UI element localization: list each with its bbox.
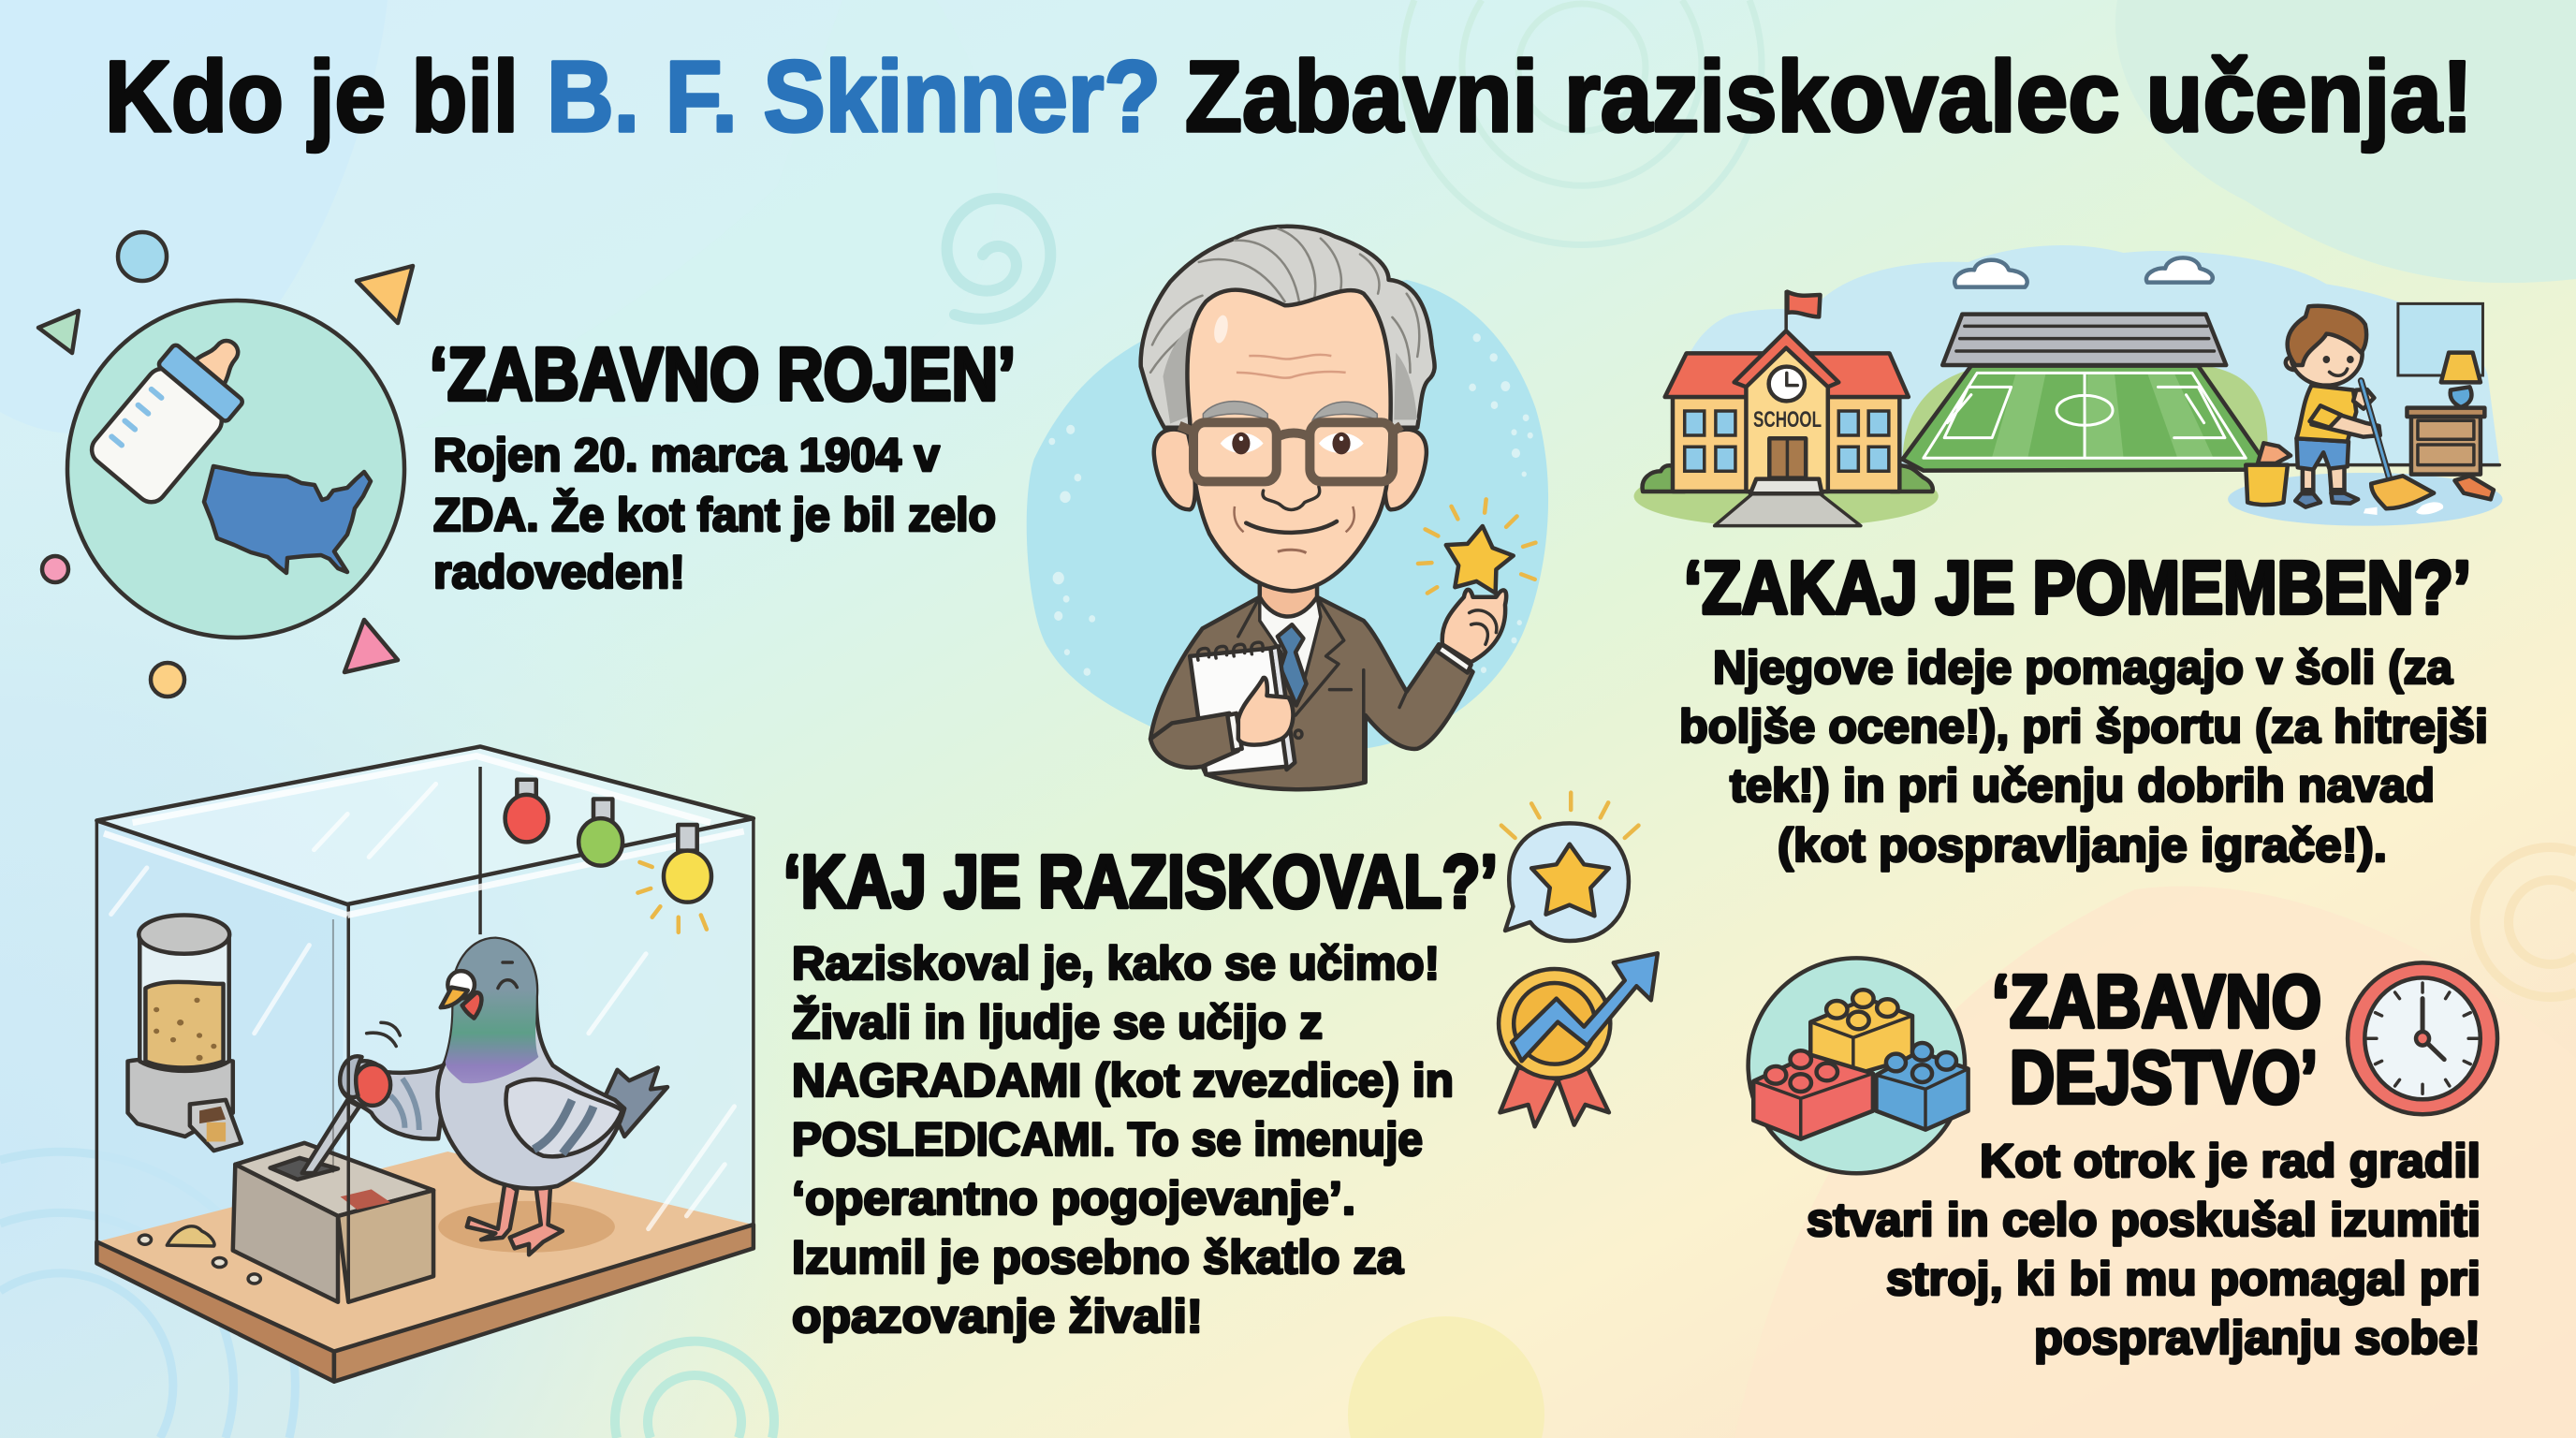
body: (kot pospravljanje igrače!). bbox=[1778, 819, 2387, 872]
blue blob bbox=[1027, 280, 1548, 749]
title bbox=[105, 39, 2473, 153]
body: stvari in celo poskušal izumiti bbox=[1807, 1194, 2481, 1246]
body: Kot otrok je rad gradil bbox=[1980, 1135, 2481, 1187]
clouds bbox=[1954, 257, 2213, 287]
icon: USA map bbox=[204, 466, 371, 573]
tower bbox=[1734, 330, 1838, 492]
green hill bbox=[1903, 365, 2268, 465]
notepad bbox=[1190, 642, 1295, 774]
hanging lights bbox=[505, 780, 711, 932]
panel: birth icon with bottle and USA bbox=[38, 232, 413, 697]
toy and debris bbox=[2364, 476, 2494, 515]
school wings bbox=[1673, 397, 1899, 492]
body: stroj, ki bi mu pomagal pri bbox=[1886, 1253, 2481, 1305]
body: NAGRADAMI (kot zvezdice) in bbox=[792, 1054, 1454, 1107]
title part: Kdo je bil: Kdo je bil bbox=[105, 39, 519, 153]
text block: Zabavno dejstvo bbox=[1807, 960, 2481, 1364]
illustration: school, sports field and tidying boy bbox=[1634, 245, 2503, 527]
icon: lego bricks in circle bbox=[1749, 958, 1969, 1173]
grandstand bbox=[1942, 315, 2226, 365]
room floor bbox=[2228, 465, 2503, 526]
icon: wall clock bbox=[2348, 962, 2497, 1114]
hair bbox=[1141, 227, 1435, 432]
seeds on floor bbox=[139, 1226, 260, 1284]
body bbox=[792, 937, 1454, 1343]
bushes bbox=[1643, 465, 1933, 492]
path bbox=[1715, 493, 1861, 526]
box walls bbox=[96, 746, 754, 1352]
lever box bbox=[233, 1143, 433, 1302]
body: boljše ocene!), pri športu (za hitrejši bbox=[1679, 700, 2488, 753]
body: tek!) in pri učenju dobrih navad bbox=[1730, 759, 2435, 812]
flag bbox=[1786, 292, 1821, 330]
body: ZDA. Že kot fant je bil zelo bbox=[433, 489, 996, 541]
neck bbox=[1260, 573, 1317, 617]
decorative circle pink bbox=[42, 556, 68, 582]
window in room bbox=[2398, 303, 2482, 375]
jacket bbox=[1150, 597, 1472, 789]
body: opazovanje živali! bbox=[792, 1290, 1203, 1343]
football field bbox=[1903, 366, 2263, 471]
right hand with cuff bbox=[1437, 590, 1506, 673]
text block: Zabavno rojen bbox=[430, 332, 1016, 598]
food dispenser bbox=[128, 915, 242, 1151]
body: Rojen 20. marca 1904 v bbox=[433, 429, 940, 481]
text block: Kaj je raziskoval bbox=[783, 840, 1498, 1343]
heading bbox=[1992, 960, 2321, 1119]
star in hand bbox=[1446, 526, 1514, 594]
shadow under pigeon bbox=[438, 1201, 615, 1253]
body: Izumil je posebno škatlo za bbox=[792, 1231, 1404, 1284]
heading: DEJSTVO’ bbox=[2010, 1035, 2318, 1119]
lever with red button bbox=[302, 1056, 390, 1173]
door and steps bbox=[1750, 438, 1822, 493]
school sign: SCHOOL bbox=[1753, 407, 1822, 433]
shirt and tie bbox=[1238, 597, 1407, 783]
school windows bbox=[1685, 411, 1889, 471]
sky blob bbox=[1673, 245, 2499, 468]
nightstand with lamp bbox=[2407, 353, 2484, 475]
bucket bbox=[2246, 443, 2291, 505]
title part: Zabavni raziskovalec učenja!: Zabavni raziskovalec učenja! bbox=[1185, 39, 2473, 153]
icon: star speech bubble bbox=[1501, 793, 1638, 941]
pigeon bbox=[341, 939, 667, 1255]
icon circle bbox=[67, 301, 404, 638]
left arm and hand bbox=[1150, 678, 1293, 768]
roof bbox=[1665, 353, 1909, 397]
body: POSLEDICAMI. To se imenuje bbox=[792, 1113, 1423, 1166]
decorative circle blue bbox=[118, 232, 167, 281]
boy bbox=[2286, 306, 2380, 507]
title part: B. F. Skinner?: B. F. Skinner? bbox=[547, 39, 1161, 153]
icons: star bubble, medal, lego and clock bbox=[1499, 793, 2497, 1173]
face bbox=[1187, 290, 1391, 591]
illustration: Skinner portrait bbox=[1027, 227, 1548, 789]
face details bbox=[1203, 314, 1377, 553]
body: ‘operantno pogojevanje’. bbox=[792, 1172, 1355, 1225]
body bbox=[1807, 1135, 2481, 1364]
body bbox=[1679, 641, 2488, 872]
ground under school bbox=[1634, 465, 1939, 527]
box base bbox=[96, 1225, 754, 1382]
icon: baby bottle bbox=[85, 315, 268, 508]
body: Živali in ljudje se učijo z bbox=[792, 996, 1323, 1049]
body: Njegove ideje pomagajo v šoli (za bbox=[1713, 641, 2453, 694]
heading: ‘ZABAVNO ROJEN’ bbox=[430, 332, 1016, 416]
body bbox=[433, 429, 996, 598]
heading: ‘ZAKAJ JE POMEMBEN?’ bbox=[1684, 546, 2471, 629]
heading: ‘ZABAVNO bbox=[1992, 960, 2321, 1043]
decorative circle yellow bbox=[151, 663, 184, 697]
illustration: pigeon in Skinner box bbox=[96, 746, 754, 1382]
ears bbox=[1154, 430, 1427, 509]
text block: Zakaj je pomemben bbox=[1679, 546, 2488, 872]
glass box edges bbox=[96, 746, 754, 1302]
heading: ‘KAJ JE RAZISKOVAL?’ bbox=[783, 840, 1498, 923]
icon: medal with rising arrow bbox=[1499, 953, 1658, 1126]
glasses bbox=[1179, 422, 1401, 481]
broom bbox=[2361, 381, 2434, 508]
decorative triangle pink bbox=[344, 620, 398, 672]
body: pospravljanju sobe! bbox=[2034, 1312, 2481, 1364]
box floor bbox=[96, 1152, 754, 1352]
sparkles bbox=[1418, 499, 1535, 594]
glass glare bbox=[111, 784, 734, 1229]
decorative triangle green bbox=[38, 311, 79, 353]
body: Raziskoval je, kako se učimo! bbox=[792, 937, 1440, 990]
body: radoveden! bbox=[433, 546, 685, 598]
decorative triangle orange bbox=[357, 266, 413, 323]
